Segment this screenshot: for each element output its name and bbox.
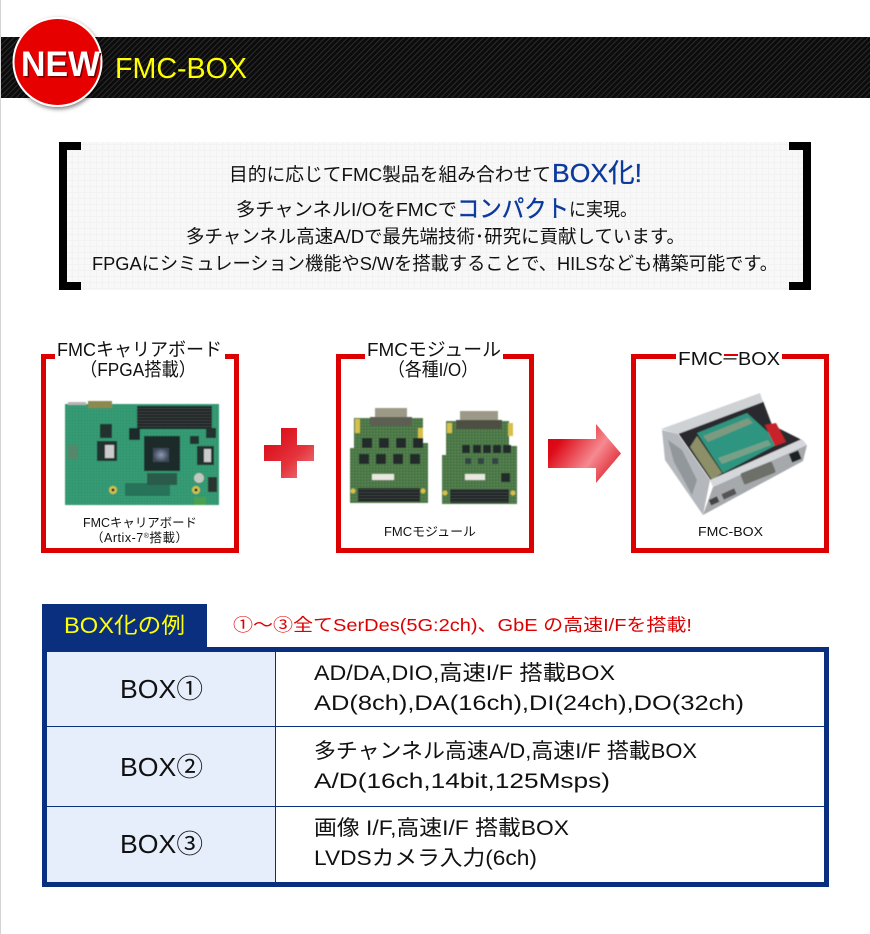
row 1: AD/DA,DIO,高速I/F 搭載BOX <box>314 662 615 685</box>
panel title <box>55 339 225 380</box>
row 2 <box>120 740 697 793</box>
front face <box>703 445 807 515</box>
tab: BOX examples <box>42 604 207 650</box>
photo: carrier board <box>65 401 219 505</box>
caption: ® <box>144 532 150 540</box>
table: BOX examples <box>44 650 826 884</box>
row 3: 画像 I/F,高速I/F 搭載BOX <box>314 817 569 840</box>
intro line 1: 目的に応じてFMC製品を組み合わせて <box>229 164 551 185</box>
left bracket <box>59 142 81 290</box>
intro line 4: FPGAにシミュレーション機能やS/Wを搭載することで、HILSなども構築可能です。 <box>92 253 778 274</box>
row 1: AD(8ch),DA(16ch),DI(24ch),DO(32ch) <box>314 692 744 715</box>
row 2: 多チャンネル高速A/D,高速I/F 搭載BOX <box>314 740 697 763</box>
right bracket <box>789 142 811 290</box>
intro line 1: BOX化! <box>552 158 642 188</box>
badge: NEW <box>12 17 102 107</box>
arrow <box>548 424 621 483</box>
panel: FMC-BOX <box>634 344 826 550</box>
caption <box>83 516 197 545</box>
tab: BOX examples: BOX化の例 <box>64 613 185 638</box>
intro line 2 <box>236 196 637 223</box>
page left edge line <box>0 0 1 934</box>
box interior <box>678 401 802 482</box>
left side face <box>662 430 710 515</box>
caption: FMCモジュール <box>384 525 476 539</box>
panel title: － <box>721 349 739 370</box>
panel title: FMCキャリアボード <box>57 339 222 360</box>
intro line 2: コンパクト <box>457 196 569 223</box>
board <box>697 413 780 473</box>
row 1: BOX① <box>120 674 203 704</box>
badge: NEW: NEW <box>21 45 100 84</box>
top rail <box>661 393 763 434</box>
photo: module B <box>442 411 517 504</box>
icon: plus <box>264 428 314 478</box>
row 3: LVDSカメラ入力(6ch) <box>314 847 537 870</box>
photo: FMC-BOX <box>661 393 807 515</box>
caption: 搭載） <box>149 530 188 545</box>
intro line 2: 多チャンネルI/OをFMCで <box>236 199 457 220</box>
panel: FMC module <box>338 339 532 550</box>
panel title: FMCモジュール <box>367 339 501 360</box>
photo: module A <box>350 408 428 503</box>
row 2: BOX② <box>120 752 203 782</box>
panel title: FMC <box>678 348 723 369</box>
panel title: BOX <box>738 348 780 369</box>
badge: NEW: NEW <box>22 46 102 86</box>
panel: intro text box <box>59 142 811 290</box>
row 1 <box>120 662 744 715</box>
intro line 2: に実現。 <box>569 199 637 220</box>
front rail top <box>710 439 807 487</box>
row 3: BOX③ <box>120 829 203 859</box>
row 3 <box>120 817 569 870</box>
panel title <box>676 344 782 370</box>
red note: ①～③全てSerDes(5G:2ch)、GbE の高速I/Fを搭載! <box>233 615 692 635</box>
panel title: （各種I/O） <box>388 359 478 380</box>
header title: FMC-BOX <box>115 53 247 85</box>
caption: FMCキャリアボード <box>83 516 197 530</box>
caption: FMC-BOX <box>698 524 763 539</box>
caption: （Artix-7 <box>91 531 143 545</box>
intro line 1 <box>229 158 642 188</box>
panel: FMC carrier board <box>44 339 236 550</box>
intro line 3: 多チャンネル高速A/Dで最先端技術･研究に貢献しています。 <box>186 226 685 247</box>
panel title: （FPGA搭載） <box>80 359 196 380</box>
row 2: A/D(16ch,14bit,125Msps) <box>314 770 610 793</box>
panel title <box>365 339 503 380</box>
header band <box>1 37 870 98</box>
